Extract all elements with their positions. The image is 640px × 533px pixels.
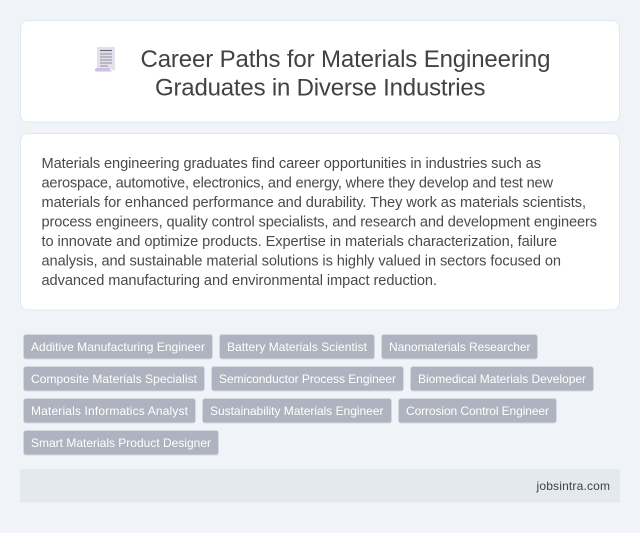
tag: Smart Materials Product Designer [24, 430, 218, 455]
title: Graduates in Diverse Industries [155, 74, 486, 102]
description text: advanced manufacturing and environmental impact reduction. [42, 273, 437, 289]
tag: Sustainability Materials Engineer: Sustainability Materials Engineer [210, 404, 384, 418]
tag: Additive Manufacturing Engineer [24, 334, 212, 359]
panel: header [20, 20, 620, 122]
tag: Materials Informatics Analyst [24, 398, 196, 423]
footer [20, 469, 620, 502]
description text: aerospace, automotive, electronics, and energy, where they develop and test new [42, 176, 553, 192]
title: Career Paths for Materials Engineering [140, 46, 550, 73]
description text [42, 156, 597, 289]
description text: process engineers, quality control specialists, and research and development engineers [42, 214, 597, 230]
tag: Corrosion Control Engineer: Corrosion Control Engineer [406, 404, 549, 418]
tag: Biomedical Materials Developer: Biomedical Materials Developer [418, 372, 586, 386]
tag: Semiconductor Process Engineer: Semiconductor Process Engineer [219, 372, 396, 386]
tag: Corrosion Control Engineer [398, 398, 556, 423]
description text: analysis, and sustainable material solutions is highly valued in sectors focused on [42, 254, 561, 270]
footer source text: jobsintra.com [536, 479, 610, 493]
description text: Materials engineering graduates find career opportunities in industries such as [42, 156, 541, 172]
tag: Semiconductor Process Engineer [212, 366, 404, 391]
icon: document scroll [95, 47, 115, 72]
description text: to innovate and optimize products. Expertise in materials characterization, failure [42, 234, 557, 250]
tag: Composite Materials Specialist [24, 366, 204, 391]
tag: Biomedical Materials Developer [410, 366, 594, 391]
tag: Materials Informatics Analyst: Materials Informatics Analyst [31, 404, 189, 418]
tag: Smart Materials Product Designer: Smart Materials Product Designer [31, 436, 211, 450]
panel: description [20, 134, 620, 310]
tag: Sustainability Materials Engineer [202, 398, 392, 423]
tag: Battery Materials Scientist: Battery Materials Scientist [227, 340, 368, 354]
tag: Nanomaterials Researcher: Nanomaterials Researcher [389, 340, 530, 354]
tag: Additive Manufacturing Engineer: Additive Manufacturing Engineer [31, 340, 205, 354]
title [140, 46, 550, 102]
tags [24, 334, 594, 455]
tag: Battery Materials Scientist [220, 334, 374, 359]
tag: Nanomaterials Researcher [382, 334, 538, 359]
tag: Composite Materials Specialist: Composite Materials Specialist [31, 372, 198, 386]
description text: materials for enhanced performance and durability. They work as materials scientists, [42, 195, 586, 211]
